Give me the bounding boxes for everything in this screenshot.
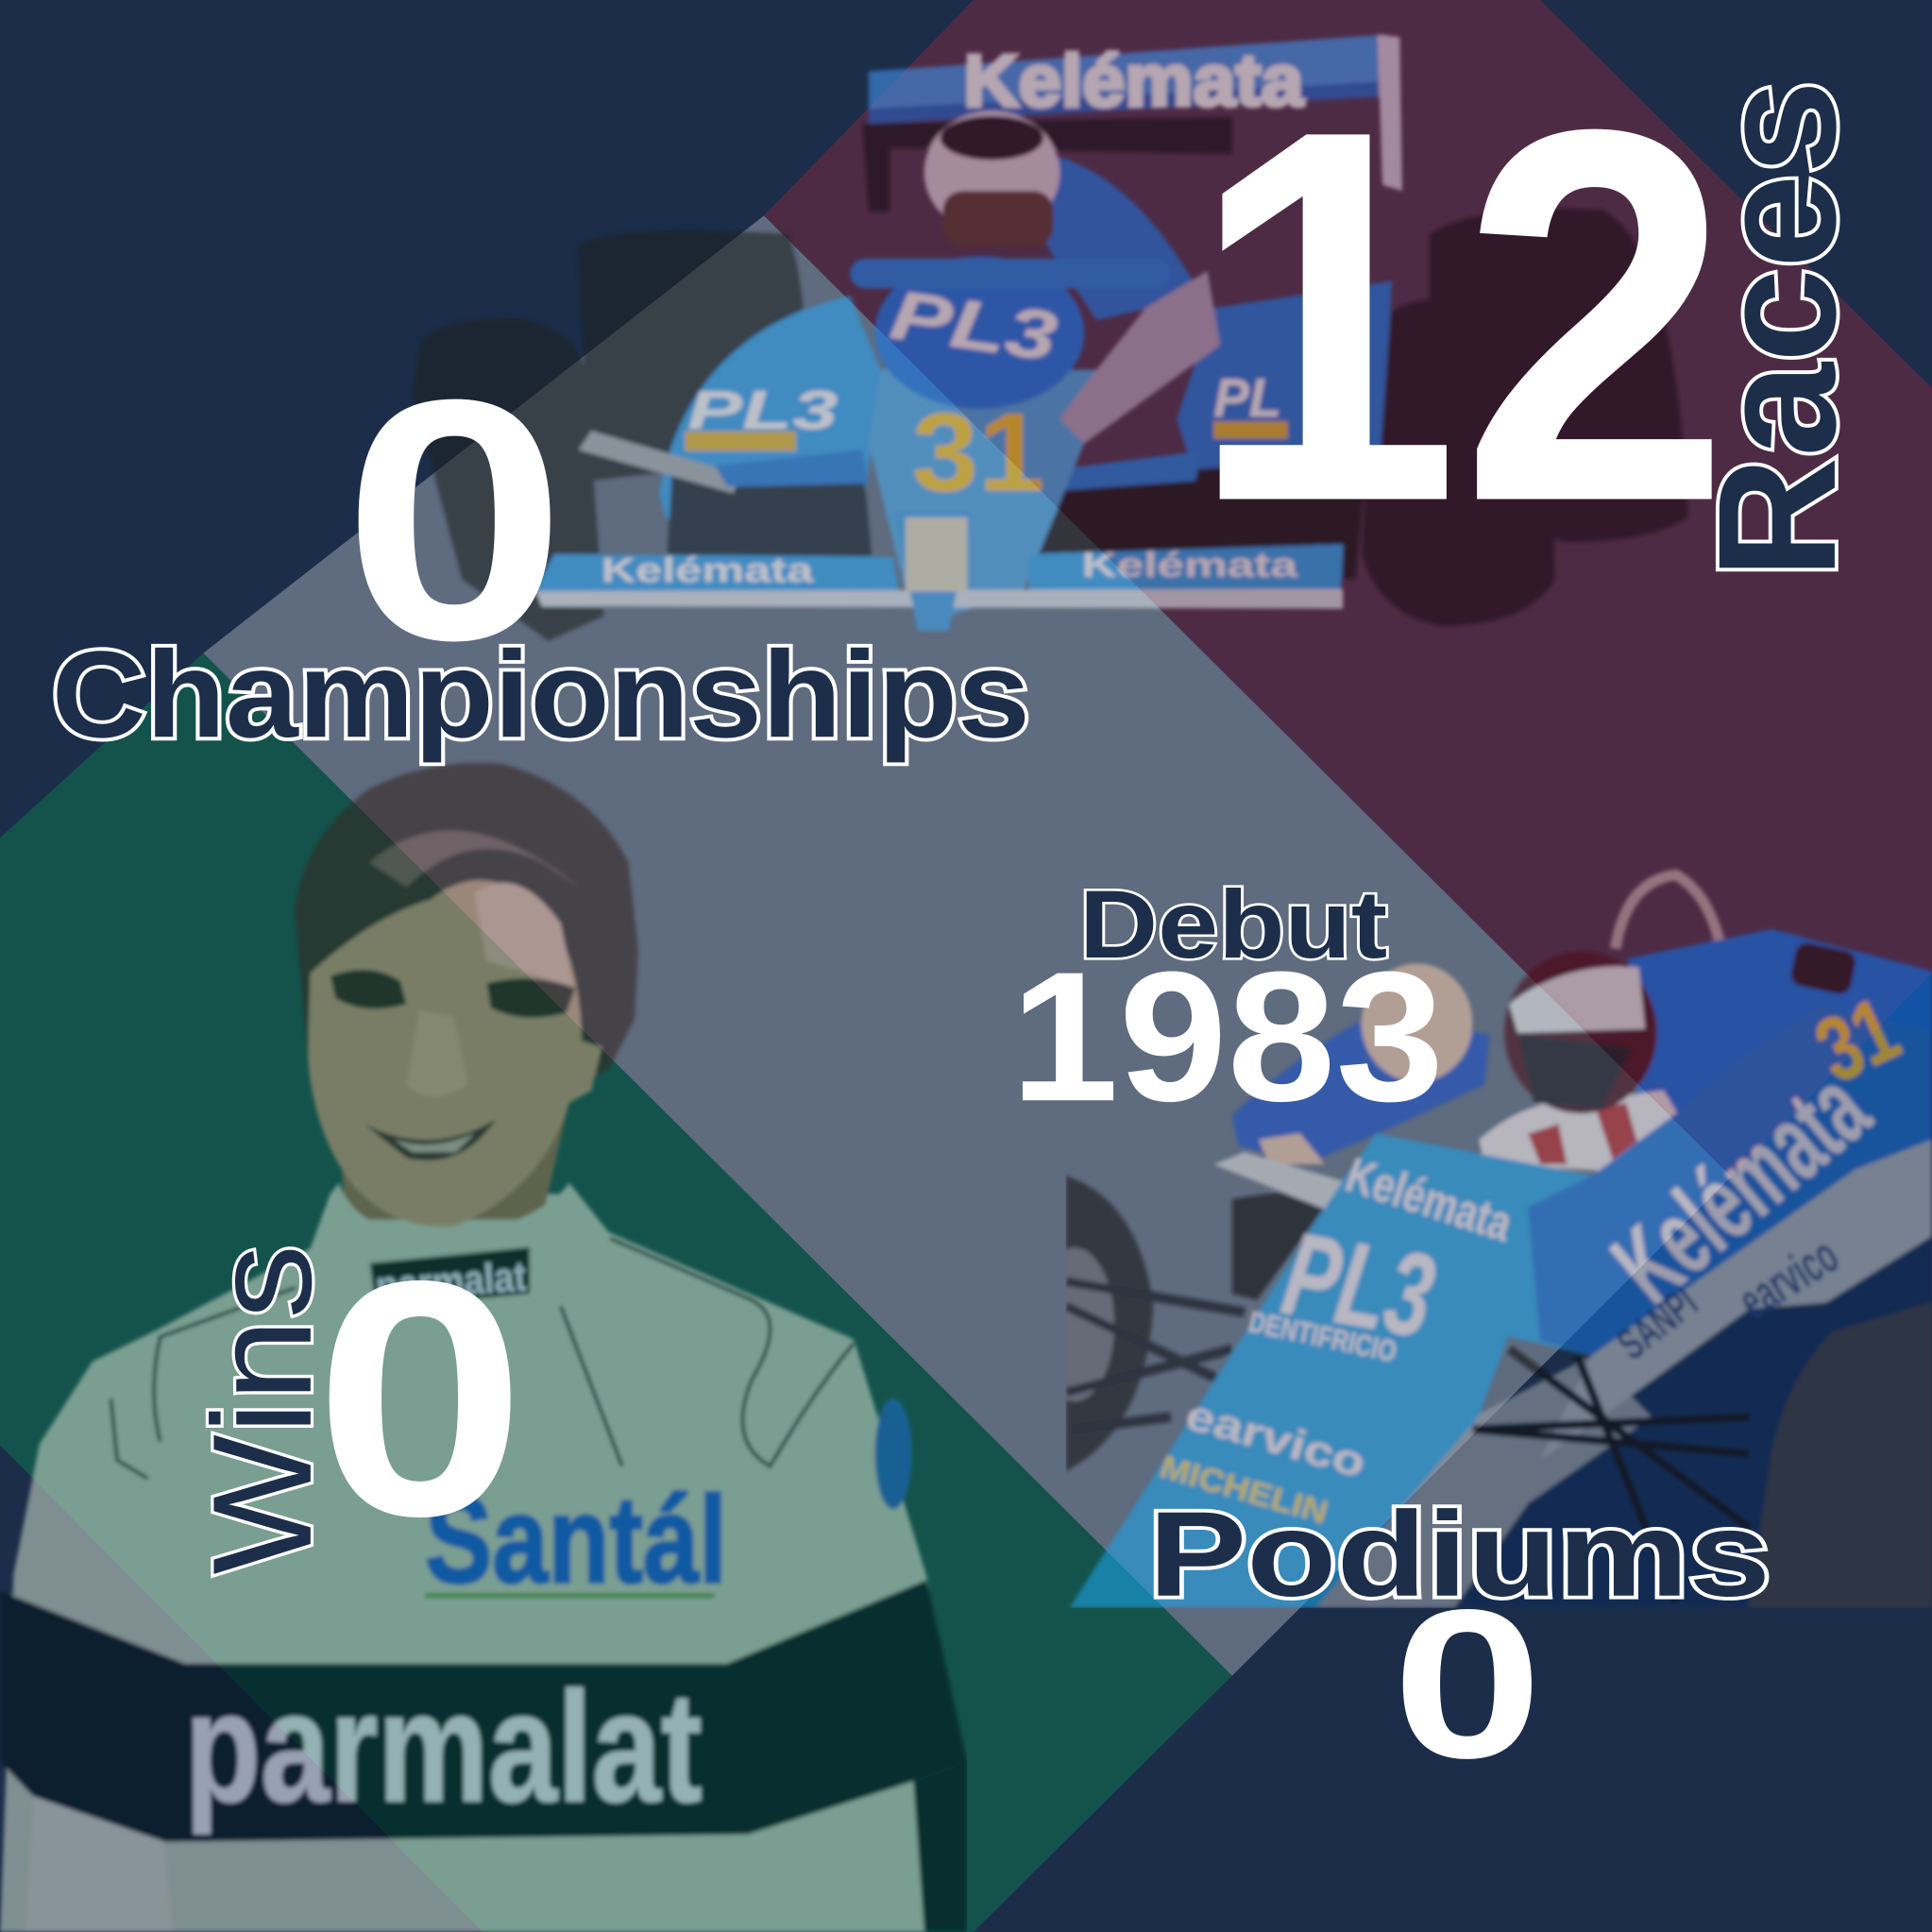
sponsor text on bodywork: Kelémata — [1340, 1147, 1518, 1252]
mechanic — [1213, 963, 1490, 1300]
overlay: navy tint top right — [1540, 0, 1932, 388]
tyres — [413, 209, 1688, 641]
overlay: maroon tint — [764, 0, 1932, 1177]
face — [308, 881, 602, 1227]
suit seams — [110, 1238, 854, 1479]
shoulder badge — [874, 1398, 912, 1509]
side pods — [659, 281, 1392, 542]
Santal logo: Santál — [425, 1470, 727, 1608]
hair — [295, 763, 638, 1084]
rear wing: Kelémata — [963, 39, 1305, 122]
photo: driver in cockpit with mechanic — [1035, 874, 1932, 1608]
main blue bodywork — [1069, 1131, 1592, 1608]
overlay: grey tint — [203, 215, 1731, 1676]
photo: racing car front view — [413, 35, 1688, 641]
cockpit nose panel — [850, 256, 1171, 409]
background: maroon diamond — [764, 0, 1932, 1177]
sponsor text on bodywork: DENTIFRICIO — [1246, 1305, 1399, 1368]
rear tyre — [1749, 1302, 1932, 1608]
engine cover and helmet — [924, 110, 1201, 320]
monocoque nose — [869, 271, 1220, 616]
under body — [579, 432, 1367, 591]
stat: 12 races number: 12 — [1189, 19, 1731, 611]
stat: Races label: Races — [1683, 80, 1871, 579]
photo: driver portrait: parmalat — [375, 1254, 528, 1311]
side pods: PL3 — [687, 381, 838, 441]
stat: Wins label: Wins — [183, 1245, 341, 1575]
grey lower bodywork — [1316, 1355, 1651, 1608]
eyes and brows — [330, 970, 575, 1161]
neck — [339, 1084, 573, 1220]
dark underside — [1454, 1232, 1932, 1608]
sponsor text on bodywork: MICHELIN — [1156, 1449, 1331, 1531]
rear wing — [862, 35, 1402, 212]
sponsor text on bodywork: SANPI — [1607, 1277, 1706, 1369]
front wheel and suspension — [1035, 1176, 1245, 1471]
background: green diamond — [0, 653, 1232, 1932]
side panel strip — [1540, 1140, 1932, 1460]
cockpit nose panel: PL3 — [886, 277, 1061, 376]
overlay: navy tint top left — [0, 0, 974, 838]
stat: 0 championships number: 0 — [343, 329, 567, 711]
sponsor text on bodywork: PL3 — [1275, 1207, 1443, 1363]
front suspension arms — [1472, 1349, 1750, 1602]
stat: Championships label: Championships — [52, 625, 1030, 763]
roll hoop — [1616, 874, 1725, 979]
stat: Debut label: Debut — [1079, 871, 1387, 978]
front wing — [536, 512, 1343, 631]
background: grey diamond — [203, 215, 1731, 1676]
side pods: PL — [1213, 368, 1281, 429]
front wing: Kelémata — [602, 551, 814, 589]
overlay: green tint — [0, 653, 1232, 1932]
collar — [329, 1181, 607, 1230]
sponsor text on bodywork: earvico — [1180, 1392, 1371, 1487]
stat: Podiums label: Podiums — [1148, 1487, 1771, 1622]
stat: 0 podiums number: 0 — [1392, 1566, 1543, 1803]
front wing: Kelémata — [1082, 546, 1298, 585]
overlay: navy tint bottom right — [974, 974, 1932, 1932]
sponsor text on bodywork: earvico — [1728, 1226, 1848, 1330]
race suit — [0, 1194, 967, 1932]
engine cover — [1625, 927, 1932, 1114]
photo: driver portrait — [0, 763, 967, 1932]
stat: 1983 debut year: 1983 — [1010, 934, 1444, 1140]
car number 31: 31 — [912, 390, 1045, 514]
driver — [1479, 951, 1686, 1171]
stat: 0 wins number: 0 — [314, 1212, 526, 1586]
overlay: navy tint bottom left — [0, 1446, 483, 1932]
forehead highlight — [474, 883, 573, 986]
parmalat chest logo: parmalat — [185, 1660, 703, 1836]
dark chest and sleeve band — [0, 1580, 967, 1842]
darker blue cockpit side — [1528, 1007, 1932, 1355]
sponsor text on bodywork — [1156, 1047, 1891, 1531]
sleeve lower — [913, 1762, 967, 1932]
